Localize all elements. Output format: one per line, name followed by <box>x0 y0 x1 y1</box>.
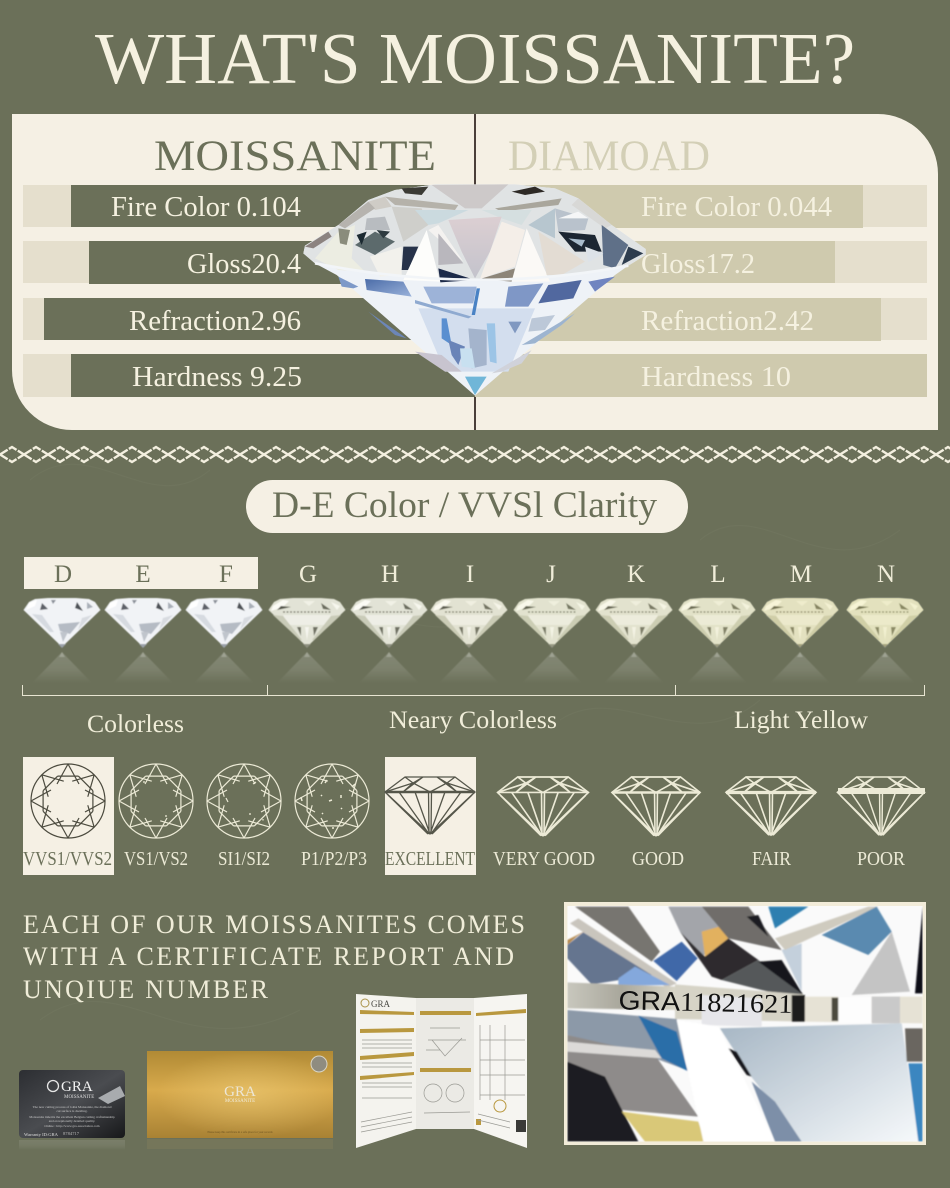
GRA card: The new cutting process of GRA Moissanite, the diamond <box>33 1105 112 1110</box>
category labels <box>87 707 868 738</box>
colour grade letters: K <box>627 561 645 588</box>
clarity labels: SI1/SI2 <box>218 849 270 870</box>
row: refraction: Refraction2.42 <box>641 305 814 337</box>
colour grade letters: G <box>299 561 317 588</box>
icon: fair <box>726 777 816 835</box>
gold envelope: Please keep this certificate in a safe place for your records <box>207 1131 273 1134</box>
certificate brochure <box>356 994 527 1148</box>
GRA card: 8784717 <box>63 1131 80 1136</box>
clarity labels: VS1/VS2 <box>124 849 188 870</box>
bracket <box>22 685 924 696</box>
icon: large diamond <box>303 184 646 396</box>
clarity scale <box>23 757 369 875</box>
certificate brochure: GRA <box>371 999 391 1009</box>
clarity labels: P1/P2/P3 <box>301 849 367 870</box>
certificate text: UNQIUE NUMBER <box>23 975 269 1004</box>
colour grade letters: H <box>381 561 399 588</box>
row: hardness: Hardness 10 <box>641 361 791 393</box>
GRA card: GRA <box>61 1079 93 1095</box>
colour grade letters: I <box>466 561 474 588</box>
row: fire color: Fire Color 0.104 <box>111 191 301 223</box>
icon: good <box>612 777 700 836</box>
icon: SI <box>207 764 281 838</box>
pill heading: color and clarity <box>246 480 688 533</box>
GRA card: and exceptionally detailed quality. <box>49 1119 95 1123</box>
colour grade diamonds <box>24 598 924 683</box>
row: fire color <box>23 185 927 228</box>
cut scale <box>385 757 925 875</box>
gold envelope: MOISSANITE <box>225 1099 255 1104</box>
clarity labels <box>23 849 367 870</box>
colour grade letters: J <box>546 561 556 588</box>
GRA card: Warranty ID:GRA <box>24 1132 59 1137</box>
cut labels: GOOD <box>632 849 684 870</box>
engraved number: GRA11821621 <box>618 985 793 1019</box>
heading: diamond: DIAMOAD <box>508 133 710 180</box>
GRA card: Online : http://www.gra-association.com <box>44 1124 100 1128</box>
icon: poor <box>837 777 925 835</box>
pill heading: color and clarity: D-E Color / VVSl Clarity <box>272 485 658 526</box>
row: refraction: Refraction2.96 <box>129 305 301 337</box>
category labels: Light Yellow <box>734 707 868 734</box>
row: gloss <box>23 241 927 284</box>
certificate text: WITH A CERTIFICATE REPORT AND <box>23 942 514 971</box>
colour grade letters: N <box>877 561 895 588</box>
icon: very good <box>498 777 588 836</box>
cut labels: VERY GOOD <box>493 849 595 870</box>
certificate text <box>23 910 525 1004</box>
cut labels: FAIR <box>752 849 791 870</box>
colour grade letters: E <box>135 561 151 588</box>
cut labels: POOR <box>857 849 905 870</box>
GRA card: Moissanite inherits the excellent Belgian cutting craftsmanship <box>29 1115 115 1119</box>
row: refraction <box>23 298 927 341</box>
row: gloss: Gloss20.4 <box>187 248 301 280</box>
colour grade letters: M <box>790 561 812 588</box>
heading: moissanite: MOISSANITE <box>154 133 436 180</box>
GRA card: cut surface is dazzling. <box>56 1109 88 1113</box>
gold envelope <box>147 1051 333 1149</box>
photo: engraved girdle number <box>564 902 926 1145</box>
decorative zigzag band <box>0 445 950 465</box>
clarity labels: VVS1/VVS2 <box>23 849 112 870</box>
colour grade letters: L <box>710 561 726 588</box>
icon: VS <box>119 764 193 838</box>
icon: excellent <box>385 777 475 834</box>
gold envelope: GRA <box>224 1084 256 1100</box>
GRA card <box>19 1070 125 1150</box>
row: hardness <box>23 354 927 397</box>
title: WHAT'S MOISSANITE? <box>95 18 855 99</box>
cut labels <box>385 849 905 870</box>
certificate text: EACH OF OUR MOISSANITES COMES <box>23 910 525 939</box>
category labels: Colorless <box>87 711 184 738</box>
icon: P <box>295 764 369 838</box>
colour grade letters <box>24 557 895 589</box>
row: fire color: Fire Color 0.044 <box>641 191 832 223</box>
cut labels: EXCELLENT <box>385 849 475 870</box>
GRA card: MOISSANITE <box>64 1095 94 1100</box>
panel: comparison <box>12 114 938 430</box>
icon: VVS <box>31 764 105 838</box>
row: gloss: Gloss17.2 <box>641 248 755 280</box>
colour grade letters: F <box>219 561 233 588</box>
colour grade letters: D <box>54 561 72 588</box>
row: hardness: Hardness 9.25 <box>132 361 302 393</box>
category labels: Neary Colorless <box>389 707 557 734</box>
